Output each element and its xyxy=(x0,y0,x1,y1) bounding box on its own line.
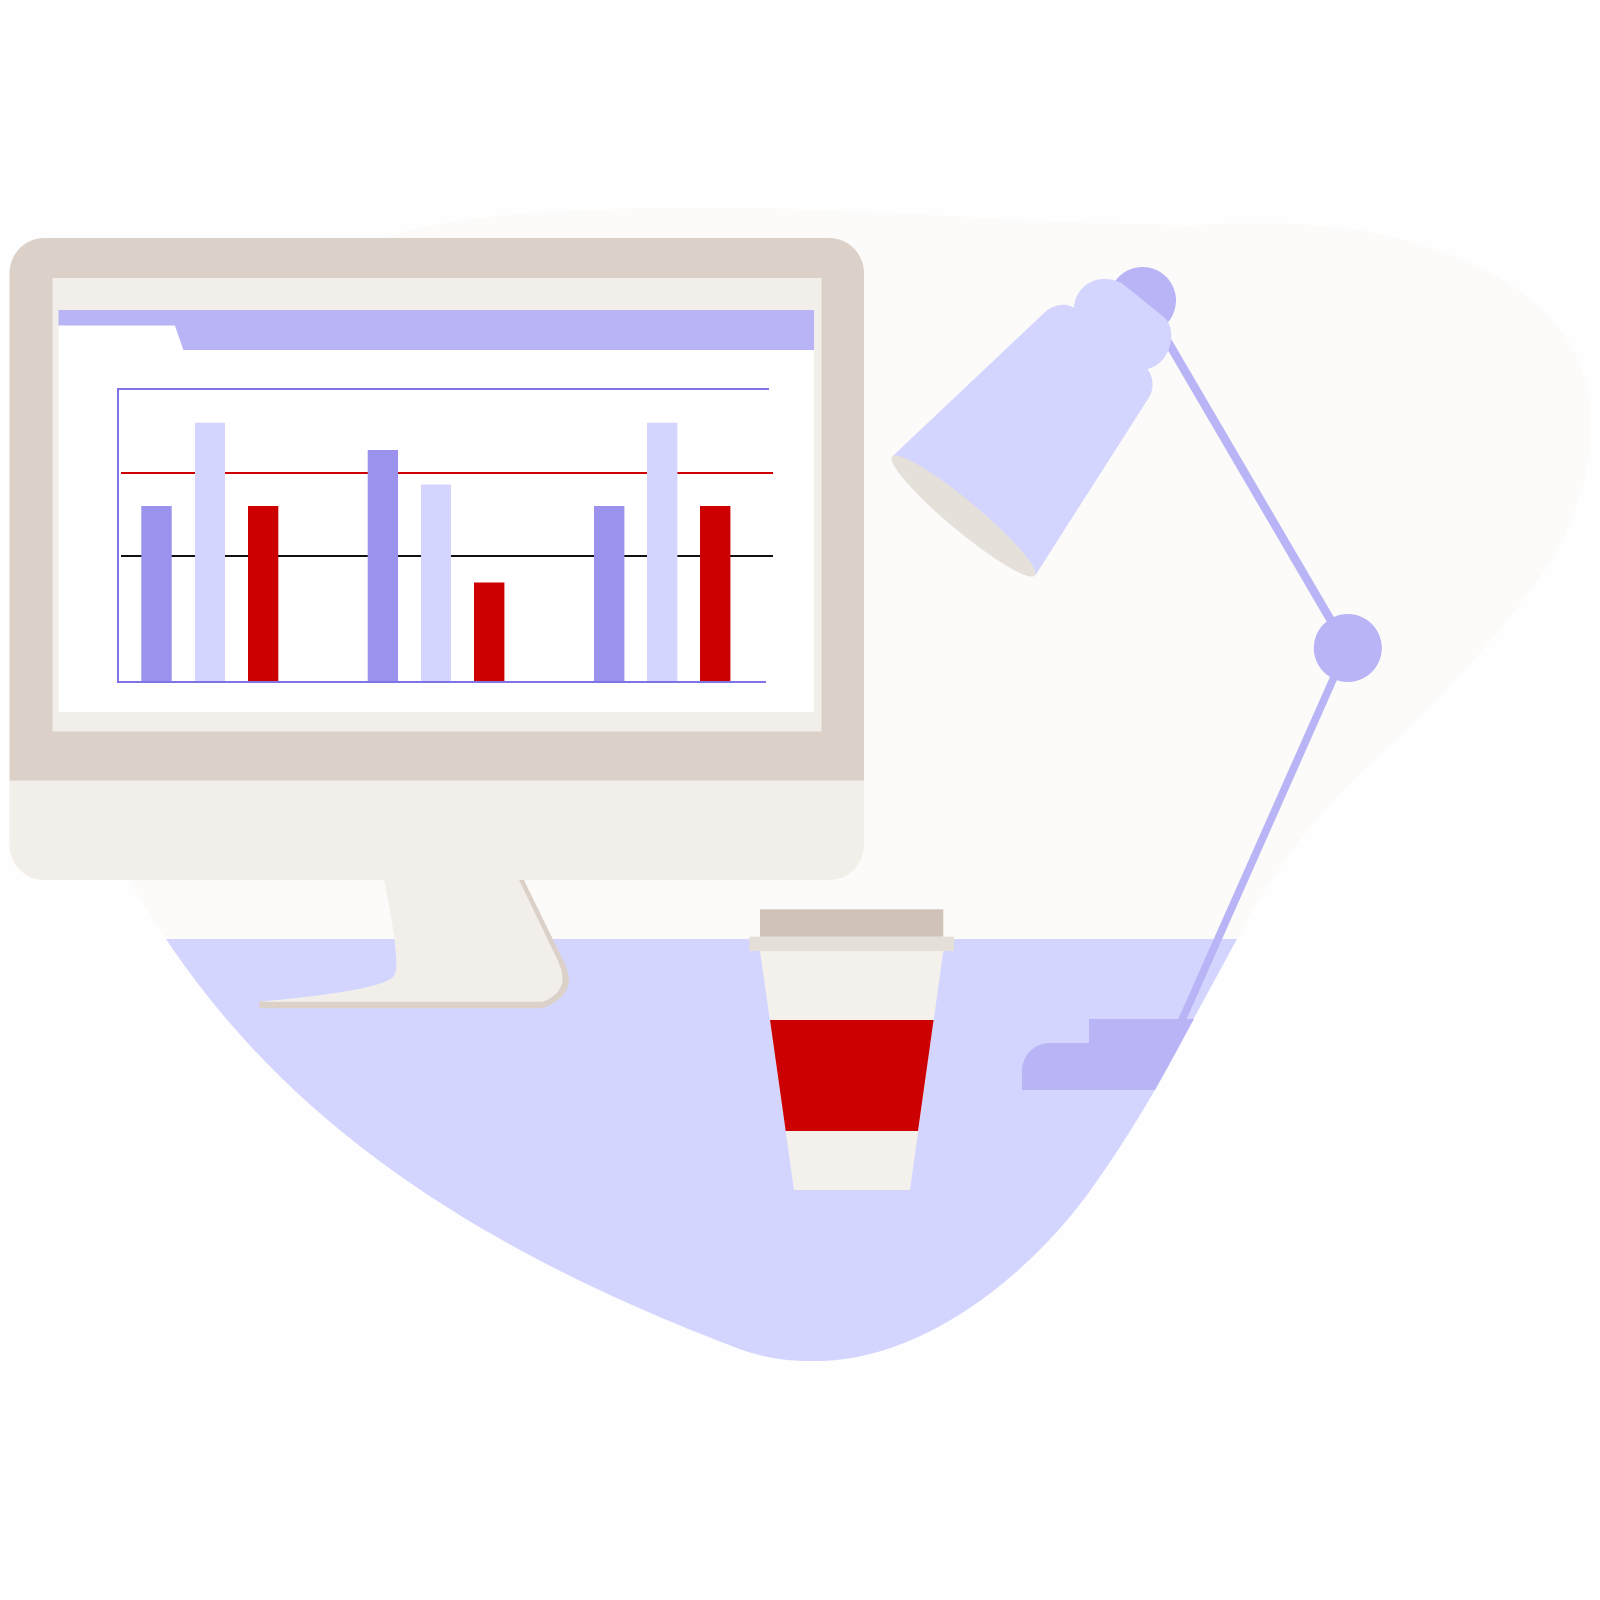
cup lid rim xyxy=(749,937,954,951)
bar group 1 xyxy=(141,423,278,681)
monitor screen xyxy=(52,278,822,732)
chart axes frame xyxy=(118,389,769,682)
lamp upper arm xyxy=(1161,330,1340,636)
cup lid top xyxy=(760,909,943,937)
black reference line xyxy=(121,555,773,557)
lamp shade xyxy=(892,279,1171,575)
cup red sleeve xyxy=(770,1020,934,1131)
background blob: cream wall xyxy=(129,208,1591,939)
screen tab xyxy=(58,326,183,350)
monitor chin xyxy=(10,760,864,880)
red reference line xyxy=(121,472,773,474)
coffee cup xyxy=(749,909,954,1190)
lamp head joint xyxy=(1109,267,1176,334)
bar group 3 xyxy=(594,423,730,681)
lamp shade opening xyxy=(882,445,1045,587)
bar group 2 xyxy=(368,450,504,681)
monitor bezel xyxy=(10,238,864,780)
monitor stand xyxy=(259,880,569,1008)
monitor xyxy=(10,238,864,880)
screen content panel xyxy=(58,350,814,712)
lamp base xyxy=(1022,1019,1194,1090)
screen header band with tab xyxy=(58,310,814,350)
cup body xyxy=(760,951,943,1190)
lamp elbow joint xyxy=(1314,614,1382,682)
background blob: lavender desk xyxy=(166,939,1237,1361)
desk lamp xyxy=(882,267,1382,1090)
bar chart xyxy=(118,389,773,682)
lamp lower arm xyxy=(1182,648,1347,1020)
